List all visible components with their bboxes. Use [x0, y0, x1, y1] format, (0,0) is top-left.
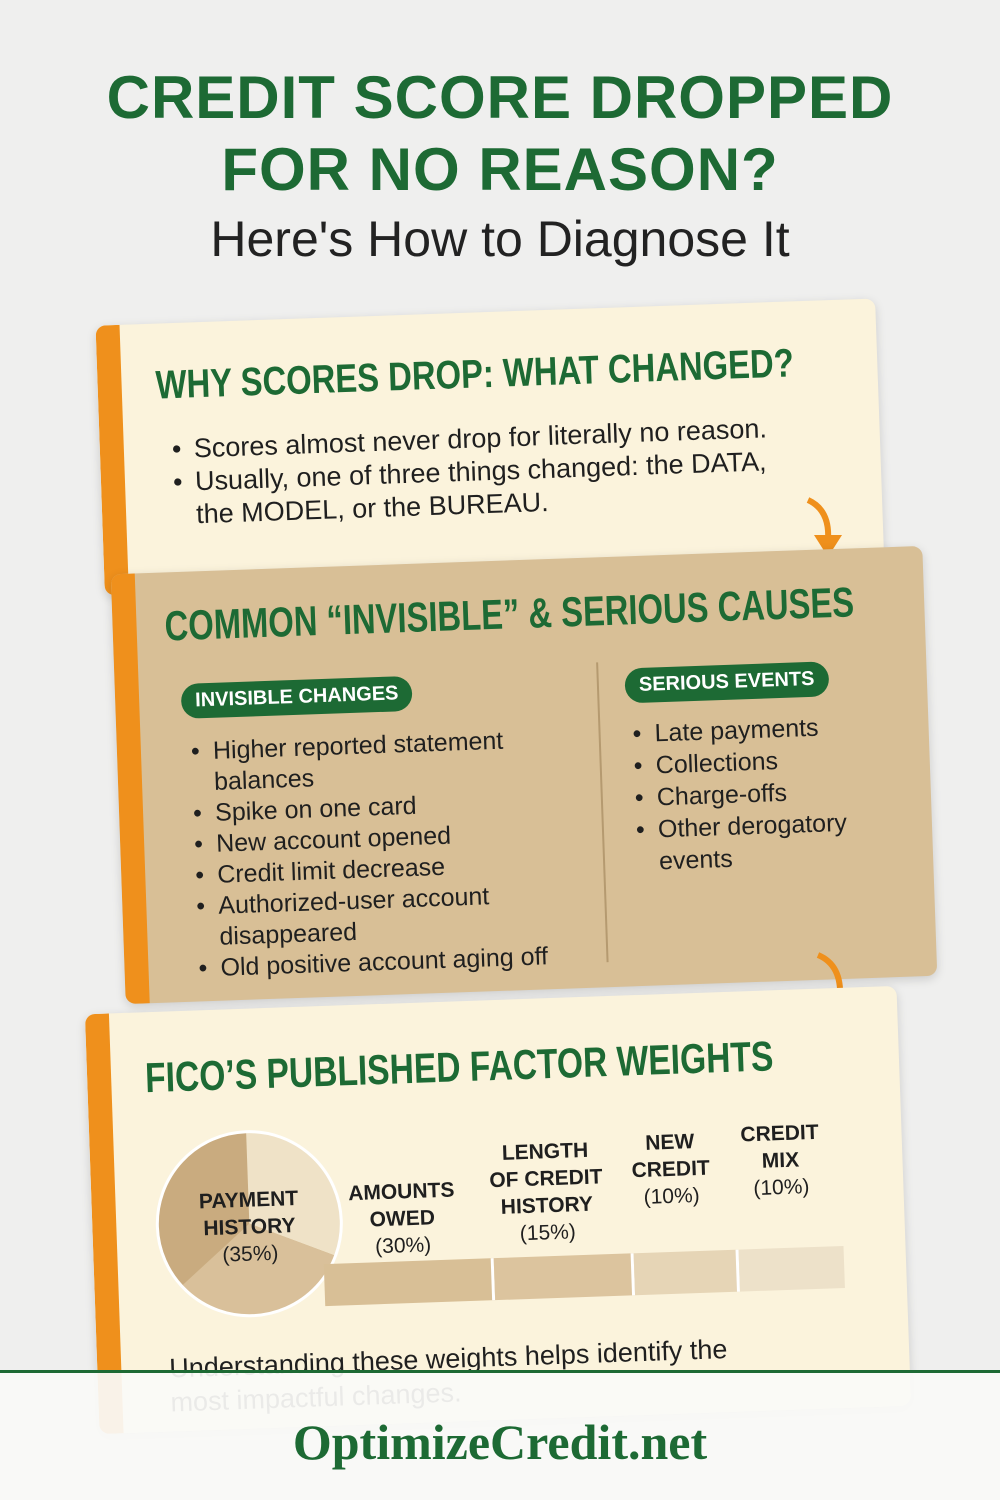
footer: [0, 1370, 1000, 1500]
pill: serious events: SERIOUS EVENTS: [639, 668, 815, 696]
label: amounts owed: (30%): [375, 1233, 432, 1258]
label: new credit: (10%): [643, 1184, 700, 1209]
heading: causes: COMMON “INVISIBLE” & SERIOUS CAUSES: [164, 578, 855, 649]
label: amounts owed: AMOUNTS: [348, 1179, 455, 1205]
list: invisible changes: Old positive account aging off: [220, 942, 548, 982]
arrow: to causes: [806, 497, 842, 550]
label: length of credit history: HISTORY: [500, 1193, 593, 1219]
list: invisible changes: [192, 727, 548, 982]
label: length of credit history: [489, 1139, 603, 1245]
title: CREDIT SCORE DROPPED: [107, 64, 893, 131]
list: invisible changes: New account opened: [216, 822, 451, 858]
label: length of credit history: (15%): [519, 1220, 576, 1245]
chart: pie payment history: [156, 1130, 343, 1318]
title: [107, 64, 893, 203]
label: amounts owed: OWED: [369, 1206, 435, 1231]
text block: explanation bullets: Scores almost never drop for literally no reason.: [193, 413, 767, 463]
label: payment history: HISTORY: [203, 1214, 296, 1240]
panel: why scores drop: [96, 298, 884, 596]
label: payment history: [199, 1187, 298, 1267]
text block: understanding weights: Understanding these weights helps identify the most impactful changes.: [169, 1334, 728, 1418]
label: amounts owed: [348, 1179, 455, 1258]
list: serious events: Collections: [655, 747, 778, 779]
label: credit mix: (10%): [753, 1175, 810, 1200]
label: new credit: CREDIT: [631, 1157, 710, 1182]
label: payment history: (35%): [222, 1242, 279, 1267]
chart: bar segments: [324, 1246, 845, 1306]
heading: why scores drop: WHY SCORES DROP: WHAT CHANGED?: [155, 341, 794, 408]
label: new credit: [631, 1130, 710, 1209]
pill: invisible changes: INVISIBLE CHANGES: [195, 682, 399, 711]
text block: explanation bullets: Usually, one of three things changed: the DATA, the MODEL, or the BUREAU.: [194, 446, 767, 529]
footer: site name: OptimizeCredit.net: [293, 1414, 707, 1470]
pill: invisible changes: [181, 676, 413, 719]
list: invisible changes: Higher reported statement balances: [212, 727, 504, 796]
panel: causes: [111, 546, 937, 1004]
label: credit mix: CREDIT: [740, 1121, 819, 1146]
label: length of credit history: OF CREDIT: [489, 1165, 603, 1192]
list: serious events: Charge-offs: [656, 779, 787, 811]
panel: FICO factor weights: [85, 986, 911, 1434]
label: credit mix: MIX: [761, 1148, 800, 1173]
list: invisible changes: Credit limit decrease: [217, 853, 446, 889]
list: invisible changes: Spike on one card: [215, 792, 417, 827]
label: payment history: PAYMENT: [199, 1187, 298, 1213]
pill: serious events: [624, 661, 829, 703]
list: serious events: Other derogatory events: [657, 809, 847, 875]
label: length of credit history: LENGTH: [501, 1139, 589, 1165]
subtitle: Here's How to Diagnose It: [210, 211, 790, 267]
text block: explanation bullets: [173, 413, 767, 529]
label: new credit: NEW: [645, 1130, 695, 1155]
arrow: to factor weights: [816, 952, 843, 988]
heading: FICO weights: FICO’S PUBLISHED FACTOR WEIGHTS: [144, 1032, 774, 1101]
label: credit mix: [740, 1121, 819, 1200]
list: serious events: Late payments: [654, 714, 819, 747]
list: serious events: [634, 714, 847, 875]
list: invisible changes: Authorized-user account disappeared: [218, 882, 490, 951]
title: FOR NO REASON?: [221, 136, 779, 203]
